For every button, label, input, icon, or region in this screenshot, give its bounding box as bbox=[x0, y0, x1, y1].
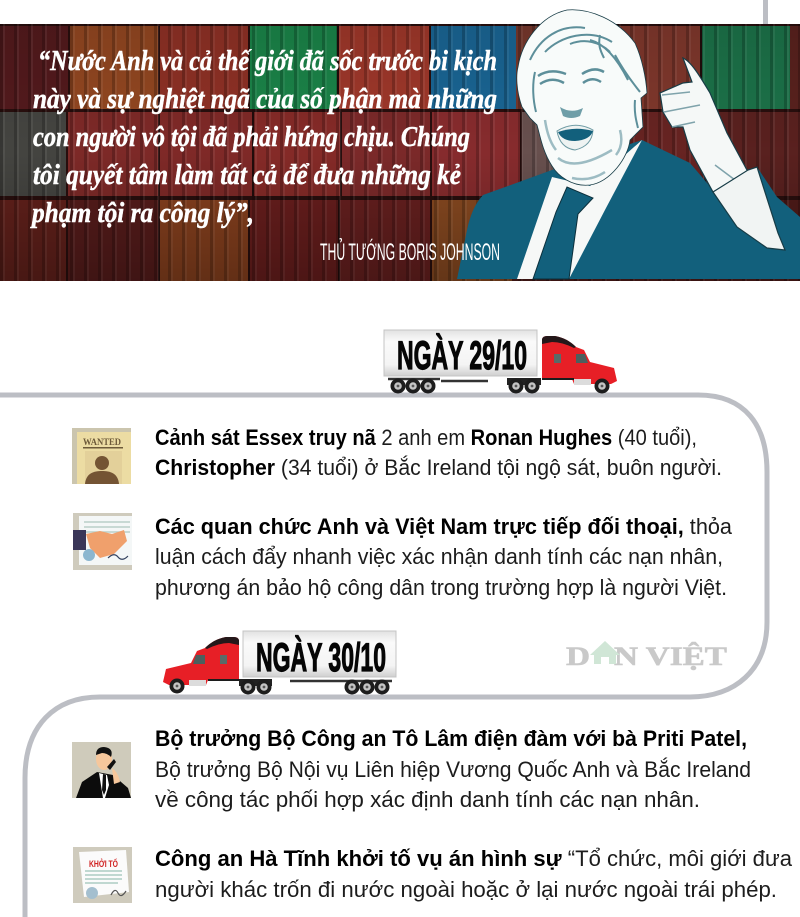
road line top connector bbox=[763, 0, 768, 26]
text block: về công tác phối hợp xác định danh tính các nạn nhân. bbox=[155, 787, 700, 812]
icon: man on phone bbox=[72, 742, 131, 798]
text block bbox=[155, 846, 792, 902]
head and hair bbox=[517, 10, 647, 185]
text block: Cảnh sát Essex truy nã 2 anh em Ronan Hughes (40 tuổi), bbox=[155, 425, 697, 450]
date label: NGÀY 30/10 bbox=[256, 635, 386, 680]
container wall background bbox=[0, 24, 800, 281]
icon: khởi tố document bbox=[73, 847, 132, 903]
icon: khởi tố document: KHỞI TỐ bbox=[89, 858, 118, 870]
truck: NGÀY 30/10 bbox=[163, 631, 396, 694]
quote attribution: THỦ TƯỚNG BORIS JOHNSON bbox=[320, 237, 500, 266]
trailer box bbox=[243, 631, 396, 677]
illustration: Boris Johnson bbox=[457, 10, 800, 279]
cheek and chin shading bbox=[545, 120, 621, 179]
quote text: phạm tội ra công lý”, bbox=[29, 197, 254, 229]
text block: Bộ trưởng Bộ Nội vụ Liên hiệp Vương Quốc Anh và Bắc Ireland bbox=[155, 757, 751, 782]
jacket bbox=[457, 140, 800, 279]
text block: Christopher (34 tuổi) ở Bắc Ireland tội ngộ sát, buôn người. bbox=[155, 455, 722, 480]
icon: wanted poster: WANTED bbox=[83, 437, 121, 447]
item: khởi tố bbox=[73, 846, 792, 903]
text block: Công an Hà Tĩnh khởi tố vụ án hình sự “Tổ chức, môi giới đưa bbox=[155, 846, 792, 871]
text block: Bộ trưởng Bộ Công an Tô Lâm điện đàm với bà Priti Patel, bbox=[155, 726, 747, 751]
text block bbox=[155, 514, 732, 600]
text block: luận cách đẩy nhanh việc xác nhận danh tính các nạn nhân, bbox=[155, 544, 723, 569]
text block: người khác trốn đi nước ngoài hoặc ở lại nước ngoài trái phép. bbox=[155, 877, 777, 902]
chassis bbox=[388, 379, 488, 381]
chassis bbox=[290, 680, 392, 682]
shirt and tie bbox=[517, 140, 642, 279]
panel: quote banner bbox=[0, 10, 800, 281]
hand bbox=[660, 58, 748, 192]
mouth bbox=[557, 125, 593, 150]
sleeve bbox=[713, 167, 785, 250]
nose bbox=[560, 107, 583, 118]
text block bbox=[155, 726, 751, 812]
text block: Các quan chức Anh và Việt Nam trực tiếp đối thoại, thỏa bbox=[155, 514, 732, 539]
finger lines bbox=[662, 92, 735, 180]
eyes and brow lines bbox=[538, 69, 604, 84]
text block bbox=[155, 425, 722, 480]
item: điện đàm bbox=[72, 726, 751, 812]
truck: NGÀY 29/10 bbox=[384, 330, 617, 394]
trailer box bbox=[384, 330, 537, 376]
icon: handshake document bbox=[73, 513, 132, 570]
quote text: con người vô tội đã phải hứng chịu. Chúng bbox=[33, 121, 470, 153]
road timeline line bbox=[0, 395, 767, 917]
item: đối thoại bbox=[73, 513, 732, 600]
wheels bbox=[390, 378, 406, 394]
wheels bbox=[170, 678, 184, 694]
cab bbox=[542, 336, 617, 384]
icon: wanted poster bbox=[72, 428, 131, 484]
hair strands bbox=[530, 27, 640, 128]
logo: Dân Việt watermark: DAN VIỆT bbox=[566, 642, 727, 671]
quote text: tôi quyết tâm làm tất cả để đưa những kẻ bbox=[33, 159, 461, 191]
quote text: này và sự nghiệt ngã của số phận mà những bbox=[33, 83, 497, 115]
quote text: “Nước Anh và cả thế giới đã sốc trước bi kịch bbox=[38, 45, 497, 77]
item: truy nã bbox=[72, 425, 722, 484]
cab bbox=[163, 637, 239, 685]
text block: phương án bảo hộ công dân trong trường hợp là người Việt. bbox=[155, 575, 727, 600]
date label: NGÀY 29/10 bbox=[397, 333, 527, 378]
quote text bbox=[29, 45, 497, 229]
